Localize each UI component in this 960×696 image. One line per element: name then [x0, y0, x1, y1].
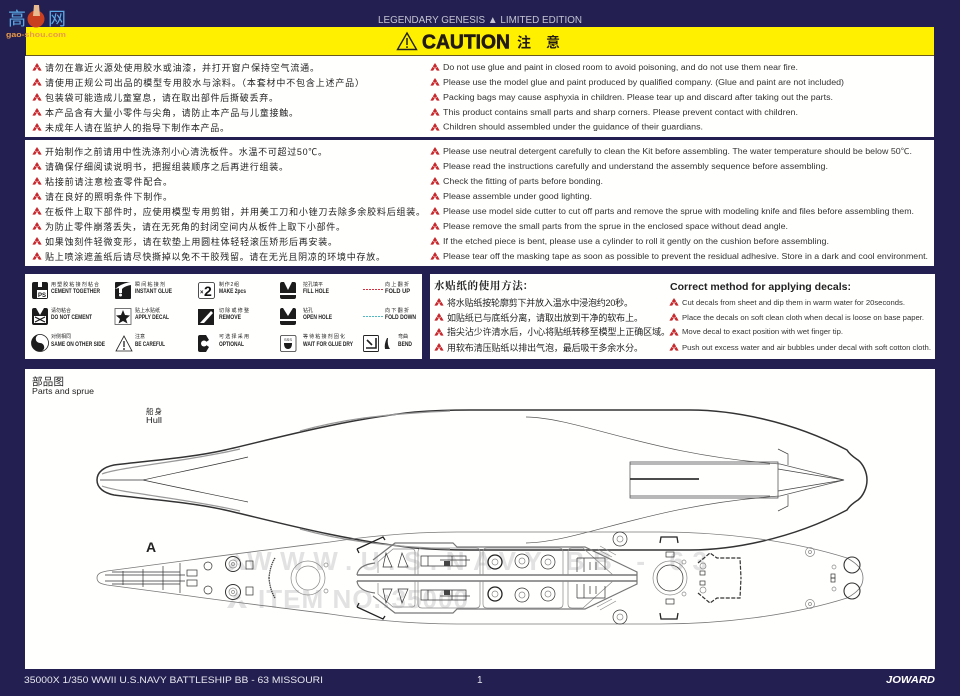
- decal steps english: Push out excess water and air bubbles under decal with soft cotton cloth.: [682, 343, 931, 352]
- legend: apply decal: [135, 307, 169, 321]
- notes english: Check the fitting of parts before bonding.: [443, 177, 603, 186]
- legend: fill hole: 挖孔填平: [303, 281, 323, 288]
- warnings english: Packing bags may cause asphyxia in children. Please tear up and discard after taking out the parts.: [443, 93, 833, 102]
- footer: page number: 1: [477, 675, 483, 686]
- legend: bend: [398, 333, 413, 348]
- hull label: Hull: [146, 416, 162, 425]
- legend: make 2: 制作2组: [219, 281, 239, 288]
- decal steps chinese: 将水贴纸按轮廓剪下并放入温水中浸泡约20秒。: [447, 297, 633, 308]
- notes english: Please remove the small parts from the sprue in the enclosed space without dead angle.: [443, 222, 788, 231]
- legend: fill hole: [303, 281, 329, 295]
- decal steps english: Place the decals on soft clean cloth when decal is loose on base paper.: [682, 313, 924, 322]
- legend: fold up: FOLD UP: [385, 289, 410, 295]
- logo: site watermark: 高: [8, 9, 26, 29]
- warnings english: [443, 63, 844, 132]
- part letter A: A: [146, 539, 156, 555]
- legend: bend: BEND: [398, 342, 413, 348]
- icon: wait for glue dry: SSS: [284, 337, 292, 342]
- footer: model title: 35000X 1/350 WWII U.S.NAVY BATTLESHIP BB - 63 MISSOURI: [24, 675, 323, 686]
- warnings chinese: 请使用正规公司出品的模型专用胶水与涂料。（本套材中不包含上述产品）: [45, 77, 364, 88]
- legend: same on other side: [51, 333, 105, 348]
- legend: do not cement: DO NOT CEMENT: [51, 315, 92, 321]
- legend: remove: 切除或修整: [219, 307, 249, 314]
- icon: be careful: [116, 336, 132, 351]
- top line: Legendary Genesis: LEGENDARY GENESIS ▲ LIMITED EDITION: [378, 15, 582, 26]
- parts heading english: Parts and sprue: [32, 386, 94, 396]
- logo: site watermark: [6, 5, 66, 39]
- panel: parts and sprue: [25, 369, 935, 669]
- legend: wait for glue dry: WAIT FOR GLUE DRY: [303, 342, 353, 348]
- caution heading: CAUTION: [422, 32, 510, 54]
- legend: bend: 弯曲: [398, 333, 408, 340]
- warnings chinese: 本产品含有大量小零件与尖角，请防止本产品与儿童接触。: [45, 107, 298, 118]
- icon: yin yang: [32, 334, 48, 352]
- icon: fold down line: [363, 316, 384, 318]
- icon: bend: [364, 336, 390, 352]
- notes chinese: 在板件上取下部件时，应使用模型专用剪钳，并用美工刀和小锉刀去除多余胶料后组装。: [45, 206, 425, 217]
- legend: instant glue: INSTANT GLUE: [135, 289, 172, 295]
- legend: same on other side: SAME ON OTHER SIDE: [51, 342, 105, 348]
- hull label: [146, 406, 162, 425]
- notes english: Please use neutral detergent carefully to clean the Kit before assembling. The water temperature should be below 50℃.: [443, 147, 912, 156]
- legend: make 2: [219, 281, 247, 295]
- decal heading english: Correct method for applying decals:: [670, 281, 851, 293]
- panel: assembly notes: [25, 140, 934, 266]
- icon: cement together: [32, 282, 48, 299]
- notes chinese: [45, 146, 425, 262]
- icon: cement together: PS: [38, 293, 46, 299]
- icon: make 2: ×: [200, 290, 204, 296]
- deck upper half details: [105, 532, 860, 578]
- legend: be careful: [135, 333, 165, 348]
- warnings chinese: [45, 62, 364, 133]
- decal steps chinese: 指尖沾少许清水后，小心将贴纸转移至模型上正确区域。: [447, 326, 670, 337]
- legend: optional: [219, 333, 249, 348]
- legend: do not cement: [51, 307, 92, 321]
- legend: fold down: FOLD DOWN: [385, 315, 416, 321]
- notes chinese: 如果蚀刻件轻微变形，请在软垫上用圆柱体轻轻滚压矫形后再安装。: [45, 236, 337, 247]
- deck drawing: [97, 532, 863, 624]
- warnings chinese: 请勿在靠近火源处使用胶水或油漆，并打开窗户保持空气流通。: [45, 62, 319, 73]
- legend: instant glue: [135, 281, 172, 295]
- notes english: [443, 147, 928, 261]
- legend: open hole: [303, 307, 332, 321]
- legend: cement together: 用塑胶粘接剂粘合: [51, 281, 99, 288]
- decal heading chinese: 水贴纸的使用方法:: [434, 278, 527, 293]
- legend: fill hole: FILL HOLE: [303, 289, 329, 295]
- legend: make 2: MAKE 2pcs: [219, 289, 247, 295]
- icon: remove: [198, 309, 214, 325]
- logo: site watermark: gao-shou.com: [6, 32, 66, 39]
- decal steps chinese: 如贴纸已与底纸分离，请取出放到干净的软布上。: [447, 312, 643, 323]
- legend: open hole: 钻孔: [303, 307, 313, 314]
- legend: fold down: 向下翻折: [385, 307, 409, 314]
- notes english: Please read the instructions carefully and understand the assembly sequence before assembling.: [443, 162, 828, 171]
- deck lower half details: [105, 578, 860, 624]
- warnings english: This product contains small parts and sharp corners. Please prevent contact with children.: [443, 108, 798, 117]
- icon: make 2: [198, 282, 214, 299]
- legend: apply decal: APPLY DECAL: [135, 315, 169, 321]
- notes english: Please tear off the masking tape as soon as possible to prevent the residual adhesive. Store in a dark and cool environment.: [443, 252, 928, 261]
- legend: open hole: OPEN HOLE: [303, 315, 332, 321]
- legend: be careful: 注意: [135, 333, 145, 340]
- legend: apply decal: 贴上水贴纸: [135, 307, 160, 314]
- icon: wait for glue dry: [280, 336, 296, 352]
- notes english: Please use model side cutter to cut off parts and remove the sprue with modeling knife and files before assembling them.: [443, 207, 914, 216]
- warnings english: Do not use glue and paint in closed room to avoid poisoning, and do not use them near fire.: [443, 63, 798, 72]
- watermark: website and item number: WWW.U.S.NAVY BB - 63: [247, 546, 707, 576]
- caution heading chinese: 注 意: [517, 34, 560, 50]
- deck outline: [97, 532, 863, 624]
- hull drawing: [97, 410, 867, 550]
- legend: wait for glue dry: [303, 333, 353, 348]
- legend: be careful: BE CAREFUL: [135, 342, 165, 348]
- icon: fill hole: [280, 282, 296, 299]
- notes chinese: 开始制作之前请用中性洗涤剂小心清洗板件。水温不可超过50℃。: [45, 146, 327, 157]
- legend: same on other side: 对侧相同: [51, 333, 71, 340]
- notes chinese: 请确保仔细阅读说明书，把握组装顺序之后再进行组装。: [45, 161, 288, 172]
- decal steps chinese: [447, 297, 670, 353]
- notes chinese: 为防止零件崩落丢失，请在无死角的封闭空间内从板件上取下小部件。: [45, 221, 345, 232]
- icon: do not cement: [32, 308, 48, 325]
- legend: remove: REMOVE: [219, 315, 241, 321]
- decal steps english: Cut decals from sheet and dip them in warm water for 20seconds.: [682, 298, 905, 307]
- icon: make 2: 2: [204, 283, 212, 299]
- warnings english: Please use the model glue and paint produced by qualified company. (Glue and paint are not included): [443, 78, 844, 87]
- hull label: 船身: [146, 406, 162, 416]
- panel: safety warnings: [25, 56, 934, 137]
- legend: cement together: [51, 281, 101, 295]
- warnings english: Children should assembled under the guidance of their guardians.: [443, 122, 703, 132]
- parts heading chinese: 部品图: [32, 375, 64, 388]
- icon: warning triangle: [398, 33, 416, 50]
- decal steps english: Move decal to exact position with wet finger tip.: [682, 327, 843, 336]
- warnings chinese: 未成年人请在监护人的指导下制作本产品。: [45, 122, 229, 133]
- legend: fold down: [385, 307, 416, 321]
- caution banner: [26, 27, 934, 56]
- legend: optional: OPTIONAL: [219, 342, 244, 348]
- warnings chinese: 包装袋可能造成儿童窒息，请在取出部件后撕破丢弃。: [45, 92, 278, 103]
- watermark: website and item number: ITEM NO.:35000: [258, 584, 468, 614]
- decal steps chinese: 用软布清压贴纸以排出气泡，最后吸干多余水分。: [447, 342, 643, 353]
- watermark: website and item number: [227, 546, 707, 614]
- panel: symbol legend: [25, 274, 422, 359]
- legend: fold up: [385, 281, 410, 295]
- decal steps english: [682, 298, 931, 352]
- legend: optional: 可选择采用: [219, 333, 249, 340]
- icon: instant glue: [115, 282, 131, 299]
- legend: remove: [219, 307, 249, 321]
- notes chinese: 粘接前请注意检查零件配合。: [45, 176, 172, 187]
- icon: apply decal: [115, 308, 131, 324]
- legend: fold up: 向上翻折: [385, 281, 409, 288]
- legend: wait for glue dry: 等待粘接剂固化: [303, 333, 345, 340]
- icon: open hole: [280, 308, 296, 325]
- notes chinese: 请在良好的照明条件下制作。: [45, 191, 172, 202]
- footer: brand logo: JOWARD: [886, 675, 935, 686]
- legend: do not cement: 请勿粘合: [51, 307, 71, 314]
- main turrets: [291, 561, 687, 595]
- notes english: Please assemble under good lighting.: [443, 192, 592, 201]
- legend: cement together: CEMENT TOGETHER: [51, 289, 101, 295]
- legend: instant glue: 瞬间粘接剂: [135, 281, 165, 288]
- icon: optional: [198, 335, 214, 352]
- panel: decal method: [430, 274, 935, 359]
- notes english: If the etched piece is bent, please use a cylinder to roll it gently on the cushion before assembling.: [443, 237, 829, 246]
- notes chinese: 贴上喷涂遮盖纸后请尽快撕掉以免不干胶残留。请在无光且阴凉的环境中存放。: [45, 251, 385, 262]
- logo: site watermark: 网: [48, 9, 66, 29]
- icon: fold up line: [363, 288, 384, 290]
